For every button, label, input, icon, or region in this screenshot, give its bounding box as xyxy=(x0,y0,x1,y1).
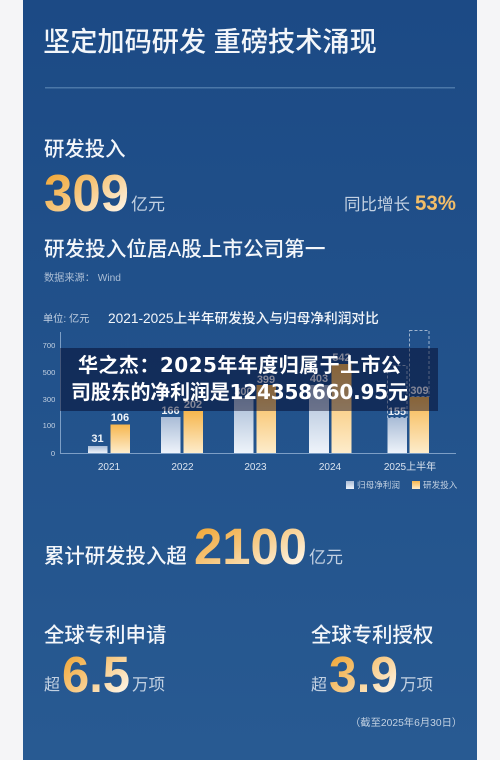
title: 坚定加码研发 重磅技术涌现 xyxy=(43,26,377,57)
y axis labels xyxy=(43,341,55,458)
overlay caption xyxy=(60,348,438,411)
x axis labels: 2021 xyxy=(98,462,121,473)
2024 bars: 542 xyxy=(332,352,351,364)
overlay caption: 华之杰：2025年年度归属于上市公 xyxy=(78,353,401,377)
global patent applications xyxy=(44,624,166,703)
2021 bars: 31 xyxy=(91,433,104,445)
x axis labels: 2024 xyxy=(319,462,342,473)
y axis labels: 300 xyxy=(43,395,55,404)
section: R&D investment xyxy=(44,87,456,284)
global patents granted xyxy=(311,624,433,703)
global patent applications: 万项 xyxy=(132,676,165,694)
y axis labels: 0 xyxy=(51,449,55,458)
2021 bars xyxy=(88,412,130,453)
2022 bars: 166 xyxy=(161,405,180,417)
y axis labels: 500 xyxy=(43,368,55,377)
2023 bars: 300 xyxy=(234,386,253,398)
2025 H1 bars: 155 xyxy=(388,406,406,418)
cumulative R&D investment: 累计研发投入超 xyxy=(44,545,187,568)
2024 bars: 403 xyxy=(310,373,328,385)
global patent applications: 全球专利申请 xyxy=(44,624,166,647)
x axis labels: 2025上半年 xyxy=(384,460,436,473)
2022 bars xyxy=(161,399,203,453)
x axis labels: 2022 xyxy=(171,462,194,473)
2024 bars xyxy=(309,352,352,453)
y axis labels: 100 xyxy=(43,421,55,430)
overlay caption: 司股东的净利润是124358660.95元 xyxy=(71,380,408,404)
axes xyxy=(60,332,456,454)
date footnote: （截至2025年6月30日） xyxy=(350,716,462,729)
global patent applications: 6.5 xyxy=(62,646,130,703)
chart unit: 单位: 亿元 xyxy=(43,312,89,325)
legend: 归母净利润 xyxy=(357,479,400,490)
2025 H1 bars: 309 xyxy=(410,385,429,397)
bar chart xyxy=(43,310,458,490)
global patents granted: 全球专利授权 xyxy=(311,624,433,647)
global patents granted: 超 xyxy=(311,676,327,694)
2022 bars: 202 xyxy=(184,399,202,411)
global patents granted: 3.9 xyxy=(329,646,398,703)
cumulative R&D investment xyxy=(44,518,343,575)
data source: 数据来源： Wind xyxy=(44,271,121,284)
2021 bars: 106 xyxy=(111,412,129,424)
x axis labels: 2023 xyxy=(244,462,267,473)
2025 H1 bars xyxy=(388,330,429,453)
global patent applications: 超 xyxy=(44,676,60,694)
2023 bars: 399 xyxy=(257,374,275,386)
y axis labels: 700 xyxy=(43,341,55,350)
heading: R&D investment: 研发投入 xyxy=(44,138,126,161)
year-on-year growth: 53% xyxy=(415,192,456,215)
big number 309: 309 xyxy=(44,165,129,223)
legend xyxy=(346,479,458,490)
global patents granted: 万项 xyxy=(400,676,433,694)
year-on-year growth: 同比增长 xyxy=(344,195,410,214)
ranking statement: 研发投入位居A股上市公司第一 xyxy=(44,238,325,261)
cumulative R&D investment: 亿元 xyxy=(309,548,343,567)
2023 bars xyxy=(234,374,276,453)
legend: 研发投入 xyxy=(423,479,458,490)
unit: 亿元 xyxy=(131,195,165,214)
chart title: 2021-2025上半年研发投入与归母净利润对比 xyxy=(108,310,379,326)
year-on-year growth xyxy=(344,192,456,215)
x axis labels xyxy=(98,460,436,473)
cumulative R&D investment: 2100 xyxy=(194,518,307,575)
